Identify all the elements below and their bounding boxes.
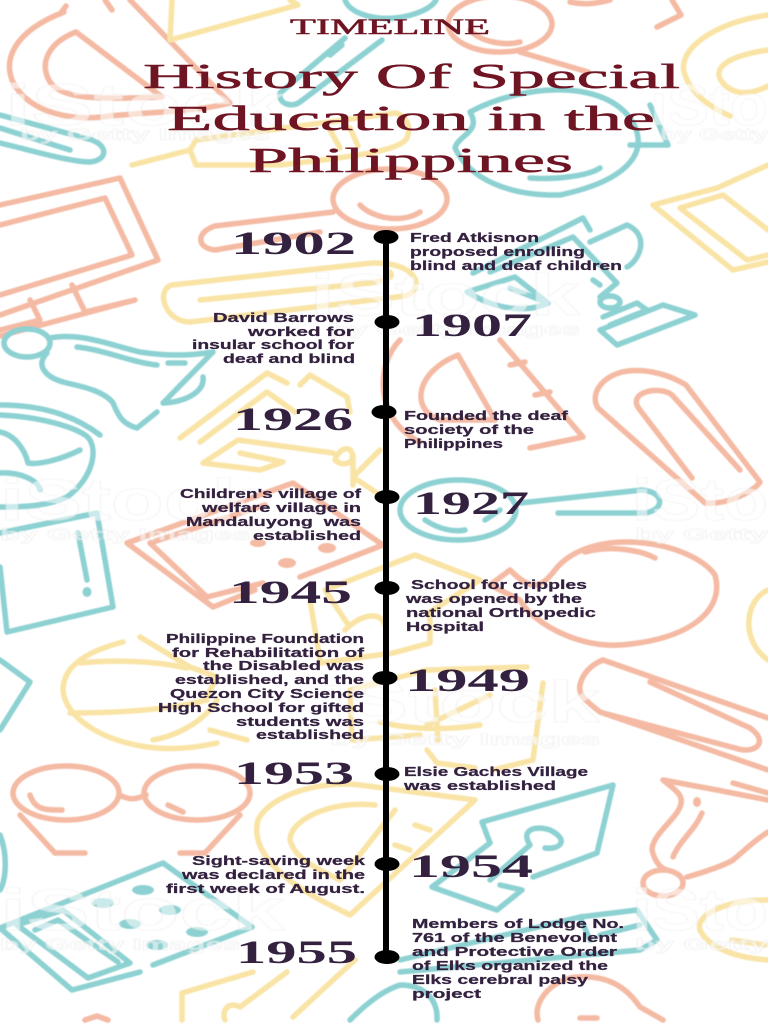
- event 1955: Members of Lodge No.: [412, 916, 624, 931]
- watermark: iStock: by Getty Images: [330, 320, 580, 339]
- icon: yellow book right: [653, 165, 768, 270]
- event 1949: [158, 631, 530, 742]
- event 1907: deaf and blind: [223, 351, 355, 366]
- icon: pen nib: [432, 785, 613, 910]
- watermark: iStock: by Getty Images: [20, 125, 270, 144]
- event 1902: blind and deaf children: [410, 258, 622, 273]
- event 1953: was established: [402, 778, 556, 793]
- event 1955: 1955: [236, 935, 357, 971]
- watermark: iStock: by Getty: [660, 125, 768, 144]
- event 1927: established: [253, 528, 361, 543]
- event 1907: 1907: [412, 308, 532, 344]
- icon: yellow megaphone: [350, 667, 543, 770]
- icon: wheelchair figure: [4, 329, 213, 428]
- event 1926: Philippines: [404, 436, 503, 451]
- icon: teal book dot: [82, 587, 92, 597]
- title: Philippines: [248, 141, 573, 180]
- icon: paperclip lower right: [580, 660, 768, 770]
- icon: yellow protractor top right: [683, 15, 768, 116]
- event 1945: national Orthopedic: [406, 605, 596, 620]
- watermark: iStock: iStock: [320, 670, 601, 735]
- event 1954: 1954: [409, 849, 533, 885]
- event 1907: David Barrows: [213, 310, 354, 325]
- event 1955: Elks cerebral palsy: [412, 972, 589, 987]
- icon: protractor salmon middle: [383, 340, 583, 448]
- icon: yellow triangle top: [170, 0, 298, 40]
- event 1902: proposed enrolling: [410, 244, 585, 259]
- event 1949: High School for gifted: [158, 700, 364, 715]
- icon: teal book left: [0, 513, 113, 632]
- icon: apple teal: [455, 90, 668, 195]
- event 1949: students was: [236, 714, 364, 729]
- icon: teal rectangle: [400, 910, 657, 972]
- event 1927: [180, 486, 529, 543]
- watermark: iStock: iSto: [632, 878, 768, 943]
- icon: paperclip teal left: [0, 115, 104, 162]
- event 1927: Mandaluyong was: [186, 514, 361, 529]
- watermark: iStock: by Getty Images: [0, 935, 240, 954]
- icon: yellow trophy: [180, 373, 380, 493]
- event 1949: for Rehabilitation of: [172, 645, 365, 660]
- event 1945: [229, 575, 596, 634]
- icon: calculator salmon: [127, 483, 383, 607]
- watermark: iStock: by Getty Images: [0, 525, 250, 544]
- icon: yellow protractor lower: [257, 784, 475, 915]
- event 1907: insular school for: [192, 337, 354, 352]
- icon: magnifier teal: [400, 480, 660, 540]
- event 1945: was opened by the: [404, 591, 582, 606]
- event 1953: [234, 756, 588, 793]
- icon: apple salmon right: [490, 542, 717, 645]
- title: TIMELINE: [290, 14, 490, 39]
- watermark: iStock: iStock: [0, 468, 261, 533]
- icon: teal calculator: [0, 863, 252, 990]
- icon: magnifier salmon middle: [201, 169, 447, 250]
- icon: paperclip right: [595, 371, 760, 503]
- icon: salmon arch bottom: [537, 977, 663, 1020]
- icon: yellow book center: [310, 555, 480, 663]
- title: Education in the: [167, 99, 655, 138]
- event 1949: the Disabled was: [203, 658, 364, 673]
- event 1955: and Protective Order: [412, 944, 617, 959]
- event 1949: established, and the: [175, 672, 364, 687]
- icon: yellow circle lower right: [699, 900, 768, 960]
- watermark: iStock: iStock: [0, 878, 286, 943]
- icon: teal ear left: [0, 405, 100, 507]
- icon: teal hump bottom: [350, 985, 437, 1020]
- event 1954: first week of August.: [166, 881, 365, 896]
- watermark: iStock: by Getty Images: [330, 730, 600, 749]
- event 1926: Founded the deaf: [404, 408, 569, 423]
- watermark: iStock: iSto: [632, 468, 768, 533]
- title: [143, 14, 681, 180]
- event 1927: 1927: [413, 486, 529, 522]
- event 1926: 1926: [233, 402, 353, 438]
- icon: yellow pencil: [132, 113, 409, 165]
- event 1955: [236, 916, 624, 1001]
- event 1927: Children's village of: [180, 486, 362, 501]
- event 1945: Hospital: [406, 619, 484, 634]
- event 1954: was declared in the: [180, 867, 365, 882]
- icon: bell: [643, 780, 768, 896]
- event 1949: Quezon City Science: [170, 686, 364, 701]
- icon: protractor top left: [9, 0, 230, 118]
- event 1907: worked for: [246, 324, 354, 339]
- event 1926: society of the: [404, 422, 534, 437]
- event 1954: Sight-saving week: [192, 853, 366, 868]
- event 1953: Elsie Gaches Village: [404, 764, 588, 779]
- watermark: iStock: iSto: [650, 73, 768, 138]
- icon: monitor: [0, 178, 158, 336]
- event 1953: 1953: [234, 756, 354, 792]
- watermark: iStock: iStock: [5, 73, 286, 138]
- event 1945: 1945: [229, 575, 352, 611]
- icon: teal trophy: [467, 218, 695, 345]
- icon: yellow clip: [164, 263, 416, 322]
- event 1902: Fred Atkisnon: [410, 230, 539, 245]
- icon: glasses: [13, 766, 250, 853]
- icon: magnifier salmon top: [448, 0, 681, 72]
- event 1955: of Elks organized the: [412, 958, 608, 973]
- event 1955: project: [412, 986, 482, 1001]
- timeline axis: [372, 230, 400, 964]
- event 1949: Philippine Foundation: [166, 631, 364, 646]
- event 1926: [233, 402, 569, 451]
- event 1954: [166, 849, 533, 896]
- icon: salmon mark bottom left: [85, 1016, 108, 1020]
- event 1949: established: [256, 727, 364, 742]
- watermark: iStock: by Getty: [635, 525, 768, 544]
- icon: yellow ball: [63, 637, 247, 748]
- event 1907: [192, 308, 532, 366]
- icon: yellow circle right edge: [749, 590, 768, 660]
- event 1955: 761 of the Benevolent: [412, 930, 618, 945]
- icon: teal tool top: [280, 0, 436, 105]
- watermark: iStock: iStock: [310, 263, 581, 328]
- event 1945: School for cripples: [411, 577, 587, 592]
- icon: yellow shape bottom: [182, 960, 355, 1020]
- icon: teal left edge: [0, 660, 30, 890]
- event 1902: [231, 226, 622, 273]
- event 1927: welfare village in: [200, 500, 361, 515]
- title: History Of Special: [143, 57, 681, 96]
- event 1949: 1949: [405, 663, 530, 699]
- watermark: iStock: by Getty: [635, 935, 768, 954]
- event 1902: 1902: [231, 226, 356, 262]
